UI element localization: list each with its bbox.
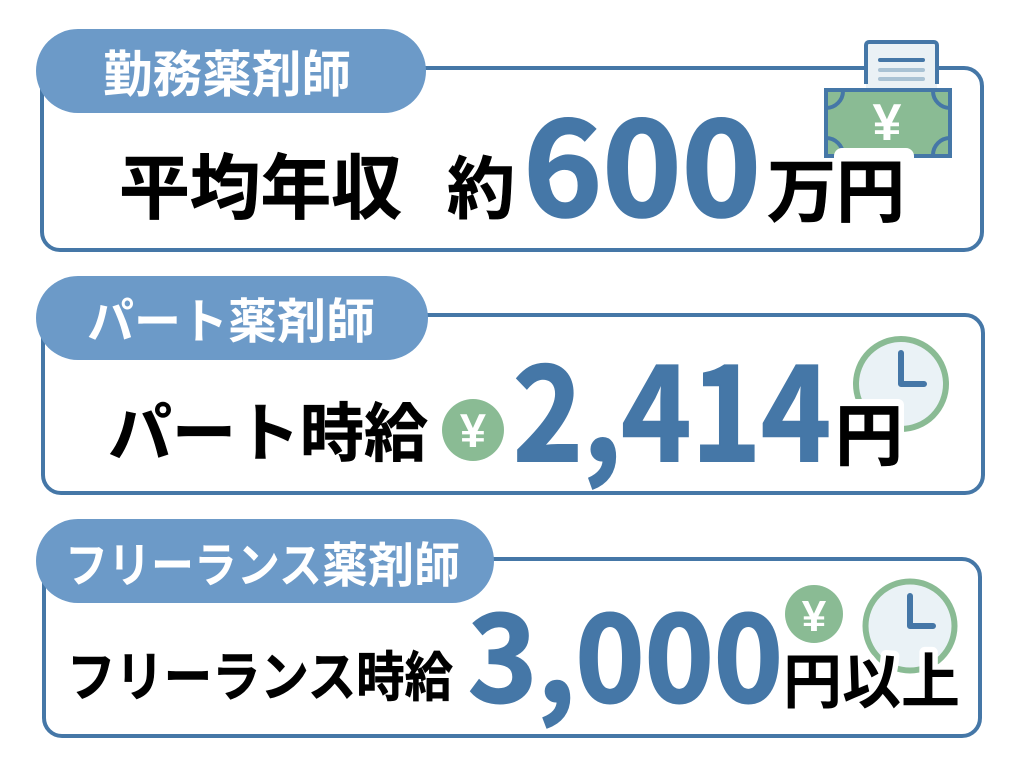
tab: パート薬剤師 bbox=[36, 276, 428, 360]
icon: banknote and receipt: ¥ bbox=[873, 94, 902, 152]
panel: freelance pharmacist bbox=[36, 519, 980, 737]
number: 3,000: 3,000 bbox=[468, 565, 783, 737]
text: 万円: 万円 bbox=[767, 154, 905, 231]
icon: clock bbox=[836, 339, 946, 449]
number: 600: 600 bbox=[523, 66, 761, 254]
text: パート時給: パート時給 bbox=[108, 398, 428, 470]
tab: フリーランス薬剤師 bbox=[36, 519, 494, 603]
icon: yen coin: ¥ bbox=[802, 592, 827, 641]
tab: フリーランス薬剤師: 薬剤師 bbox=[322, 540, 460, 593]
icon: yen coin bbox=[785, 585, 843, 643]
panel: salaried pharmacist bbox=[36, 29, 982, 254]
panel: part-time pharmacist bbox=[36, 276, 983, 499]
text: 円: 円 bbox=[835, 399, 903, 475]
icon: banknote and receipt bbox=[826, 42, 950, 168]
tab: 勤務薬剤師: 勤務薬剤師 bbox=[103, 47, 351, 103]
icon: clock bbox=[866, 582, 954, 670]
tab: パート薬剤師: パート bbox=[87, 296, 228, 349]
text: 約: 約 bbox=[447, 152, 515, 228]
tab: フリーランス薬剤師: フリーランス bbox=[65, 540, 322, 593]
text: 平均年収: 平均年収 bbox=[119, 150, 402, 229]
text: フリーランス時給: フリーランス時給 bbox=[67, 648, 453, 708]
icon: yen coin bbox=[442, 399, 504, 461]
tab: パート薬剤師: 薬剤師 bbox=[228, 296, 375, 349]
text: 円以上: 円以上 bbox=[783, 649, 960, 716]
tab: 勤務薬剤師 bbox=[36, 29, 426, 113]
icon: yen coin: ¥ bbox=[460, 404, 486, 457]
number: 2,414: 2,414 bbox=[513, 312, 831, 499]
